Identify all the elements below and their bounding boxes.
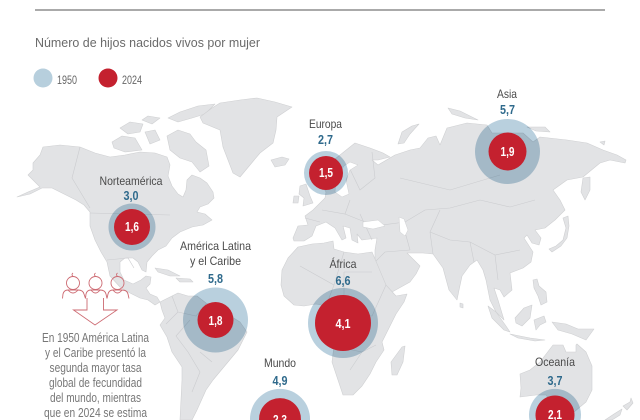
- uk and ireland: [293, 184, 313, 206]
- bubble: world: [250, 389, 310, 420]
- greenland: [200, 98, 292, 177]
- sri lanka and japan: [460, 216, 569, 308]
- label: latin america: América Latina: [180, 239, 251, 253]
- sakhalin and kamchatka: [581, 177, 590, 200]
- australia: [520, 344, 592, 415]
- label: europe: 2,7: [318, 132, 333, 147]
- arctic islands: [112, 104, 215, 172]
- caspian sea: [399, 217, 408, 236]
- label: europe: [309, 117, 342, 147]
- south america: [160, 293, 247, 420]
- label: asia: Asia: [497, 87, 517, 101]
- label: africa: 6,6: [336, 273, 350, 288]
- label: africa: África: [330, 256, 357, 271]
- label: asia: 5,7: [500, 102, 515, 117]
- text block: callout: global de fecundidad: [49, 375, 142, 390]
- siberian islands: [448, 108, 605, 145]
- label: europe: Europa: [309, 117, 342, 131]
- bubble: europe: 1,5: [319, 165, 333, 180]
- label: north america: [100, 174, 163, 203]
- bubble: africa: [308, 288, 378, 358]
- africa: [281, 241, 407, 395]
- label: world: Mundo: [264, 356, 296, 370]
- label: oceania: 3,7: [548, 373, 562, 388]
- label: oceania: Oceanía: [535, 355, 575, 369]
- label: latin america: y el Caribe: [190, 254, 241, 268]
- text block: callout: [42, 330, 150, 420]
- bubble: latin america: [183, 288, 248, 352]
- icon: three babies with down arrow: [62, 273, 129, 325]
- text block: callout: segunda mayor tasa: [50, 360, 142, 375]
- subtitle: Número de hijos nacidos vivos por mujer: [35, 35, 261, 50]
- baltic sea: [335, 162, 358, 197]
- legend: 2024: [122, 73, 142, 87]
- iceland: [271, 157, 289, 167]
- label: north america: 3,0: [124, 188, 138, 203]
- label: asia: [497, 87, 517, 117]
- label: world: 4,9: [272, 373, 288, 388]
- bubble: north america: 1,6: [125, 219, 139, 234]
- bubble: north america: [108, 204, 156, 250]
- label: latin america: [180, 239, 251, 286]
- bubble: oceania: [529, 389, 581, 420]
- bubble: latin america: 1,8: [208, 313, 222, 328]
- world map: [17, 98, 633, 420]
- label: oceania: [535, 355, 575, 388]
- caribbean: [155, 268, 193, 282]
- text block: callout: y el Caribe presentó la: [45, 345, 147, 360]
- label: world: [264, 356, 296, 388]
- text block: callout: que en 2024 se estima: [44, 405, 148, 420]
- novaya zemlya: [398, 124, 419, 144]
- text block: callout: En 1950 América Latina: [42, 330, 150, 345]
- new zealand: [605, 398, 633, 420]
- madagascar: [391, 346, 405, 375]
- legend: [34, 68, 142, 88]
- bubble: europe: [304, 151, 348, 195]
- label: north america: Norteamérica: [100, 174, 163, 188]
- text block: callout: del mundo, mientras: [50, 390, 141, 405]
- legend: 1950: [57, 73, 77, 87]
- bubble: africa: 4,1: [336, 316, 350, 331]
- label: africa: [330, 256, 357, 288]
- bubble: asia: [475, 119, 540, 184]
- philippines: [533, 279, 547, 305]
- eurasia: [293, 123, 626, 320]
- north america: [17, 145, 214, 305]
- label: latin america: 5,8: [208, 271, 223, 286]
- black sea: [363, 220, 385, 229]
- bubble: asia: 1,9: [500, 144, 514, 159]
- southeast asia islands: [488, 305, 594, 341]
